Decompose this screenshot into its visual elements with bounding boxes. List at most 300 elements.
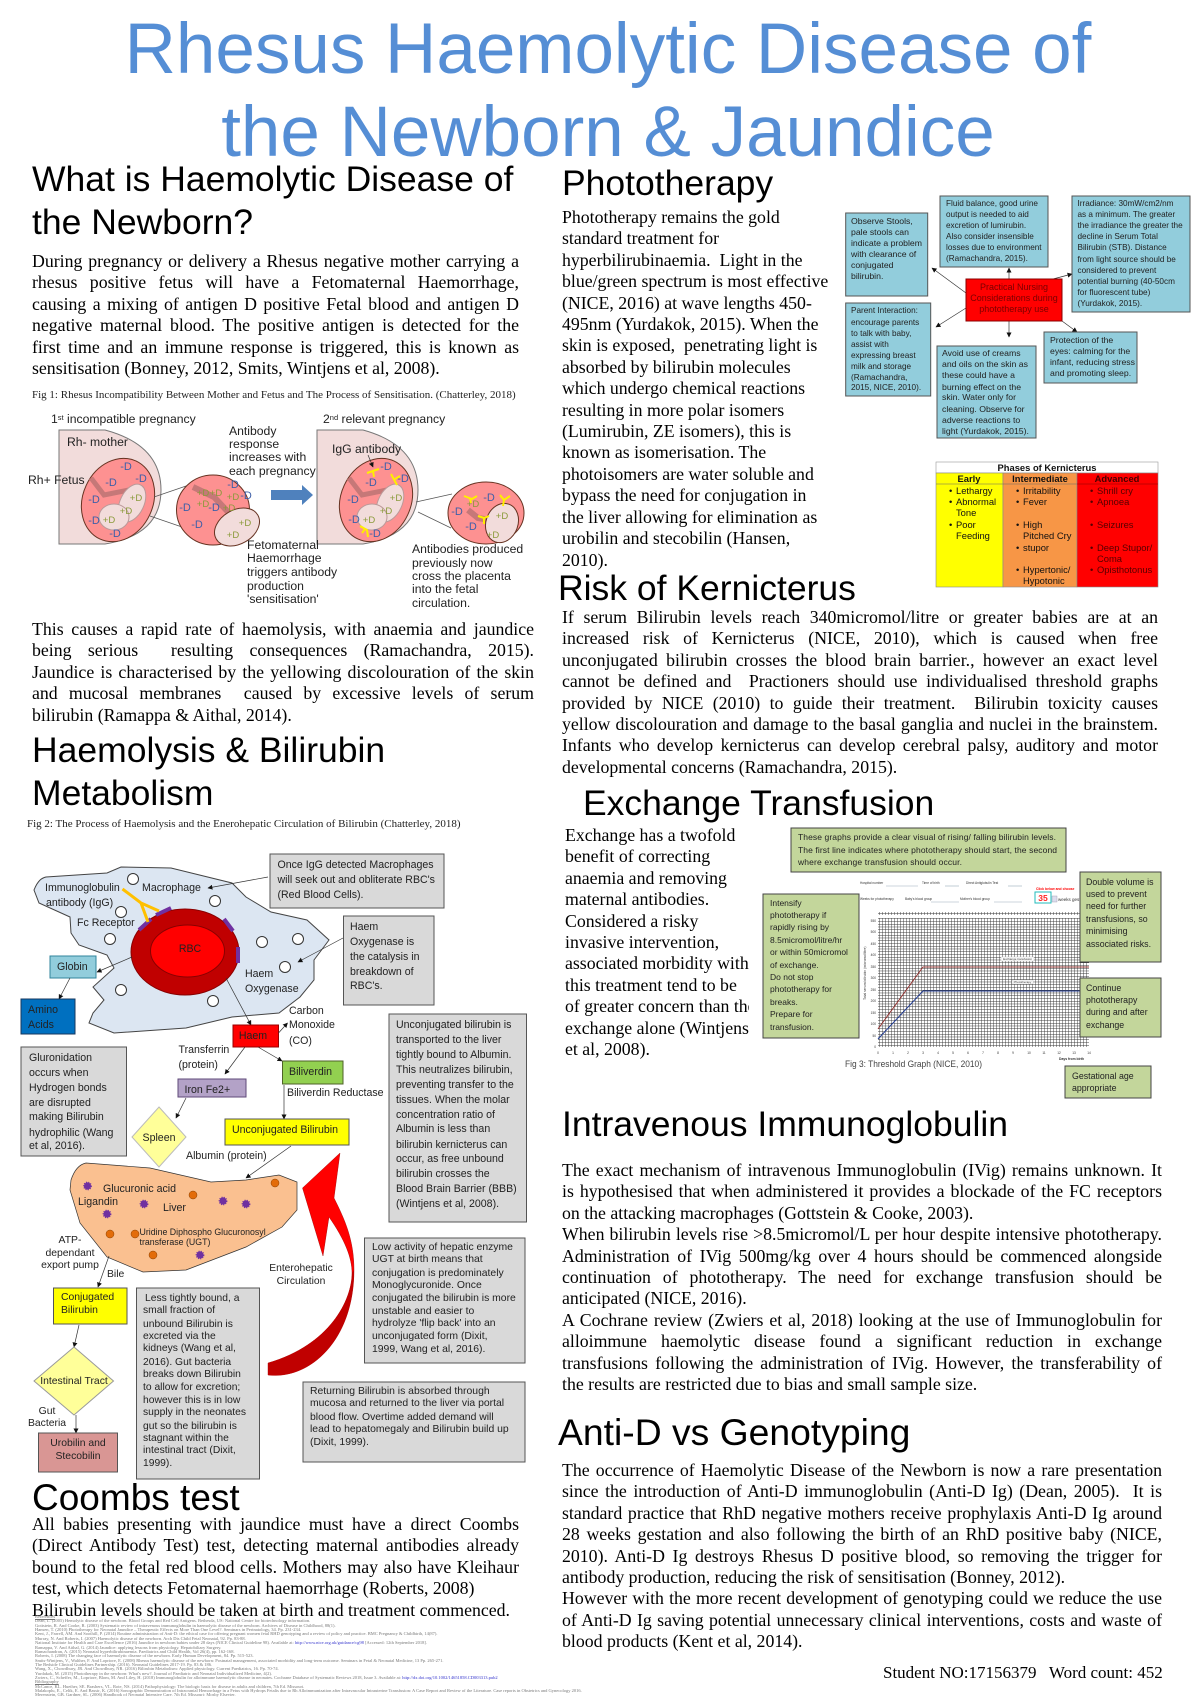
figure 1 labels: Antibodies produced [412, 542, 523, 556]
liver: Albumin (protein) [186, 1150, 267, 1162]
column: intermediate: • [1016, 519, 1019, 530]
box: irradiance: considered to prevent [1078, 266, 1157, 275]
figure 1 labels: relevant pregnancy [338, 412, 446, 426]
callout: continue phototherapy: during and after [1086, 1007, 1148, 1017]
liver [41, 1146, 297, 1272]
callout: unconjugated bilirubin: Blood Brain Barrier (BBB) [396, 1183, 517, 1195]
box: fluid balance: Also consider insensible [946, 232, 1034, 241]
threshold chart: 1 [892, 1051, 894, 1055]
threshold chart: 0 [877, 1051, 879, 1055]
second pregnancy mother and fetus [317, 430, 426, 554]
threshold chart: Exchange transfusion [1003, 957, 1032, 961]
box: avoid creams: and oils on the skin as [942, 359, 1029, 369]
callout: intensify phototherapy: phototherapy for [770, 984, 832, 994]
enlarged view one: -D [179, 502, 191, 514]
graph form header: 35 [1038, 893, 1048, 903]
box: irradiance: decline in Serum Total [1078, 232, 1158, 241]
callout: returning bilirubin: lead to hepatomegaly and Bilirubin build up [310, 1424, 509, 1435]
callout: low activity of UGT: hydrolyze 'flip back' into an [372, 1318, 496, 1329]
column: advanced: • [1090, 496, 1093, 507]
second pregnancy mother and fetus: +D [390, 493, 402, 504]
macrophage cell: antibody (IgG) [46, 897, 113, 909]
table title: Phases of Kernicterus [998, 462, 1096, 473]
text block: phototherapy: skin is exposed, penetrating light is [562, 335, 817, 355]
first pregnancy mother and fetus: -D [109, 528, 121, 540]
column: intermediate: Irritability [1023, 485, 1061, 496]
column: early: Abnormal [956, 496, 996, 507]
callout: low activity of UGT: unstable and easier to [372, 1306, 474, 1317]
conjugated bilirubin path: Conjugated [61, 1292, 114, 1303]
arrow: enterohepatic circulation [268, 1153, 354, 1375]
caption: figure 1: Fig 1: Rhesus Incompatibility Between Mother and Fetus and The Process of Sensitisation. (Chatterley, 2018) [32, 389, 516, 401]
references: Roberts, I. (2008) The changing face of haemolytic disease of the newborn. Early Human Development, 84. Pp. 515-523. [35, 1653, 254, 1658]
callout: unconjugated bilirubin: bilirubin kernicterus can [396, 1139, 507, 1151]
callout: double volume: transfusions, so [1086, 914, 1148, 924]
box: observe stools: bilirubin. [851, 271, 883, 281]
figure 1 labels: production [247, 579, 304, 593]
callout: double volume [1080, 872, 1161, 962]
globin and amino acids [21, 956, 132, 1034]
second pregnancy mother and fetus: -D [365, 477, 377, 489]
enlarged view one [150, 475, 266, 554]
text block: haemolysis consequences: This causes a rapid rate of haemolysis, with anaemia and jaundice [32, 619, 534, 639]
callout: double volume: Double volume is [1086, 877, 1154, 887]
box: parent interaction: 2015, NICE, 2010). [851, 383, 921, 392]
first pregnancy mother and fetus: +D [103, 515, 115, 526]
box: observe stools: conjugated [851, 260, 894, 270]
text block: haemolysis consequences: being serious resulting consequences (Ramachandra, 2015). [32, 640, 534, 660]
column: advanced: Coma [1097, 553, 1123, 564]
callout: haem oxygenase [298, 916, 434, 1005]
text block: exchange transfusion: Considered a risky [565, 911, 698, 931]
text block: phototherapy: hyperbilirubinaemia. Light in the [562, 250, 802, 270]
threshold chart: 12 [1057, 1051, 1061, 1055]
callout: low activity of UGT: conjugation is predominately [372, 1268, 504, 1279]
first pregnancy mother and fetus [59, 430, 168, 554]
conjugated bilirubin path: Stecobilin [55, 1451, 101, 1462]
references: Malakoplu, E., Celik, E. And Bassir, K. (2016) Sonographic Demonstration of Intracranial Hemorrhage in a Fetus with Hydrops Fetalis due to Rh Alloimmunization after Intravascular Intrauterine Transfusion: A Case Report and Review of the Literature. Case reports in Obstetrics and Gynecology 2016. [35, 1688, 582, 1693]
callout: double volume: need for further [1086, 901, 1146, 911]
threshold chart: 0 [874, 1045, 876, 1049]
callout: intensify phototherapy [763, 894, 859, 1038]
callout: gluronidation: et al, 2016). [29, 1140, 85, 1152]
callout: unconjugated bilirubin: bilirubin crosses the [396, 1168, 490, 1180]
column: early: Tone [956, 507, 976, 518]
callout: unconjugated bilirubin: preventing transfer to the [396, 1079, 514, 1091]
callout: continue phototherapy: phototherapy [1086, 995, 1138, 1005]
liver: ATP- [59, 1235, 81, 1246]
text block: exchange transfusion [565, 825, 756, 1059]
text block: introduction: negative maternal blood. The positive antigen is detected for the [32, 315, 519, 335]
text block: coombs test: (Direct Antibody Test) test, detecting maternal antibodies already [32, 1535, 519, 1555]
callout: low activity of UGT: Monoglycuronide. Once [372, 1280, 482, 1291]
figure 1 labels: circulation. [412, 596, 470, 610]
text block: risk of kernicterus: developmental concerns (Ramachandra, 2015). [562, 757, 897, 777]
second pregnancy mother and fetus: -D [369, 528, 381, 540]
globin and amino acids: Acids [28, 1019, 54, 1031]
threshold chart: Days from birth [1059, 1057, 1084, 1061]
text block: coombs test: Bilirubin levels should be taken at birth and treatment commenced. [32, 1600, 510, 1620]
callout: gluronidation [21, 1047, 126, 1156]
haem and products: Biliverdin Reductase [287, 1087, 384, 1099]
conjugated bilirubin path: Intestinal Tract [40, 1376, 108, 1387]
references: References [35, 1614, 55, 1619]
column: intermediate [1003, 473, 1077, 587]
haem and products: (CO) [289, 1035, 312, 1047]
callout: macrophages: Once IgG detected Macrophages [278, 859, 434, 871]
graph form header: Time of birth [922, 881, 940, 885]
text block: haemolysis consequences: Jaundice is characterised by the yellowing discolouration of the skin [32, 662, 534, 682]
threshold chart: 6 [967, 1051, 969, 1055]
callout: less tightly bound: small fraction of [143, 1305, 215, 1316]
threshold chart: 4 [937, 1051, 939, 1055]
text block: intravenous immunoglobulin: anticipated (NICE, 2016). [562, 1288, 747, 1308]
figure 3: threshold graph with callouts [749, 825, 1167, 1105]
callout: less tightly bound: stagnant within the [143, 1433, 229, 1444]
haem and products: Transferrin [178, 1044, 229, 1056]
callout: continue phototherapy: Continue [1086, 983, 1121, 993]
references: Dean, L. (2005) Hemolytic disease of the newborn. Blood Groups and Red Cell Antigens. Bethesda, US: National Centre for biotechnology information. [35, 1618, 310, 1623]
box: observe stools [846, 213, 928, 296]
threshold chart: Total serum bilirubin (micromol/litre) [863, 946, 867, 1000]
column: early [936, 473, 1003, 587]
column: early: Feeding [956, 530, 990, 541]
spleen decision [132, 1107, 186, 1167]
enlarged view two: +D [467, 499, 479, 510]
text block: risk of kernicterus: cannot be defined and Practioners should use individualised threshold graphs [562, 671, 1158, 691]
text block: exchange transfusion: invasive intervention, [565, 932, 719, 952]
callout: low activity of UGT: Low activity of hepatic enzyme [372, 1242, 513, 1253]
box: irradiance: for fluorescent tube) [1078, 288, 1151, 297]
liver: Liver [163, 1202, 186, 1214]
threshold chart: 7 [982, 1051, 984, 1055]
callout: returning bilirubin: blood flow. Overtime added demand will [310, 1412, 494, 1423]
text block: introduction: rhesus positive fetus will have a Fetomaternal Haemorrhage, [32, 272, 519, 292]
callout: less tightly bound: kidneys (Wang et al, [143, 1343, 236, 1354]
text block: risk of kernicterus: yellow discolouration and damage to the basal ganglia and nuclei in the brainstem. [562, 714, 1158, 734]
text block: anti-d vs genotyping: blood products (Kent et al, 2014). [562, 1631, 802, 1651]
column: advanced: Seizures [1097, 519, 1134, 530]
threshold chart: 300 [871, 976, 876, 980]
heading: phototherapy: Phototherapy [562, 163, 773, 203]
callout: less tightly bound: supply in the neonates [143, 1407, 246, 1418]
figure 1 labels: response [229, 437, 279, 451]
concept map: practical nursing considerations [845, 196, 1190, 438]
callout: haem oxygenase: Oxygenase is [350, 936, 414, 948]
callout: low activity of UGT: unconjugated form (Dixit, [372, 1331, 488, 1342]
text block: anti-d vs genotyping: 2010). Anti-D Ig destroys Rhesus D positive blood, so removing the trigger for [562, 1546, 1162, 1566]
text block: haemolysis consequences: bilirubin (Ramappa & Aithal, 2014). [32, 705, 292, 725]
graph form header: Baby's blood group [905, 897, 932, 901]
threshold chart: 13 [1072, 1051, 1076, 1055]
text block: intravenous immunoglobulin [562, 1160, 1162, 1394]
haem and products: (protein) [178, 1059, 218, 1071]
text block: intravenous immunoglobulin: When bilirubin levels rise >8.5micromol/L per hour despite intensive phototherapy. [562, 1224, 1162, 1244]
text block: anti-d vs genotyping: 28 weeks gestation and also following the birth of an RhD positive baby (NICE, [562, 1524, 1162, 1544]
box: avoid creams [937, 346, 1036, 438]
figure 1 labels: cross the placenta [412, 569, 511, 583]
haem and products [176, 978, 384, 1145]
text block: phototherapy: known as isomerisation. The [562, 442, 766, 462]
title: Rhesus Haemolytic Disease of [125, 10, 1091, 89]
threshold chart: 11 [1042, 1051, 1046, 1055]
threshold chart: 5 [952, 1051, 954, 1055]
box: irradiance: from light source should be [1078, 255, 1176, 264]
column: intermediate: stupor [1023, 542, 1049, 553]
enlarged view one: +D [239, 518, 251, 529]
box: avoid creams: Avoid use of creams [942, 348, 1021, 358]
references: National Institute for Health and Care Excellence (2016) Jaundice in newborn babies under 28 days (NICE Clinical Guideline 98). Available at: http://www.nice.org.uk/guidance/cg98 [Accessed: 12th September 2018]. [35, 1640, 427, 1645]
column: advanced: • [1090, 542, 1093, 553]
threshold chart: 2 [907, 1051, 909, 1055]
figure 1 labels: into the fetal [412, 582, 478, 596]
callout: unconjugated bilirubin: tightly bound to Albumin. [396, 1049, 511, 1061]
callout: unconjugated bilirubin: Albumin is less than [396, 1123, 490, 1135]
callout: less tightly bound: however this is in low [143, 1395, 241, 1406]
text block: exchange transfusion: exchange alone (Wintjens [565, 1018, 749, 1038]
callout: unconjugated bilirubin: occur, as free unbound [396, 1153, 504, 1165]
text block: intravenous immunoglobulin: continuation of phototherapy. The need for exchange transfusion should be [562, 1267, 1162, 1287]
second pregnancy mother and fetus: -D [347, 494, 359, 506]
callout: intensify phototherapy: of exchange. [770, 960, 819, 970]
globin and amino acids: Globin [57, 961, 88, 973]
threshold chart: 450 [871, 942, 876, 946]
column: intermediate: Intermediate [1012, 473, 1068, 484]
text block: exchange transfusion: Exchange has a twofold [565, 825, 735, 845]
threshold chart: 3 [922, 1051, 924, 1055]
callout: less tightly bound: 2016). Gut bacteria [143, 1357, 231, 1368]
callout: low activity of UGT [364, 1238, 525, 1363]
text block: introduction [32, 251, 519, 378]
box: fluid balance: Fluid balance, good urine [946, 199, 1038, 208]
column: intermediate: High [1023, 519, 1042, 530]
box: protection of the eyes: eyes: calming for the [1050, 346, 1130, 356]
enlarged view two: -D [483, 492, 495, 504]
callout: intensify phototherapy: transfusion. [770, 1022, 814, 1032]
callout: returning bilirubin: Returning Bilirubin is absorbed through [310, 1386, 490, 1397]
threshold chart: Phototherapy [1014, 980, 1032, 984]
heading: what is haemolytic disease [32, 159, 514, 242]
box: protection of the eyes: infant, reducing stress [1050, 357, 1136, 367]
threshold chart: 400 [871, 953, 876, 957]
text block: risk of kernicterus [562, 607, 1158, 777]
threshold chart: 250 [871, 988, 876, 992]
references: Wang, X., Chowdhury, JR. And Chowdhury, NR. (2016) Bilirubin Metabolism: Applied physiology. Current Paediatrics, 16. Pp. 70-74. [35, 1666, 279, 1671]
callout: haem oxygenase: RBC's. [350, 980, 383, 992]
column: advanced: Apnoea [1097, 496, 1130, 507]
macrophage cell: Haem [245, 968, 273, 980]
red blood cell: RBC [179, 943, 202, 955]
figure 1 labels: increases with [229, 450, 306, 464]
macrophage cell: Macrophage [142, 882, 201, 894]
callout: unconjugated bilirubin [389, 1014, 526, 1222]
figure 1 labels: IgG antibody [332, 442, 402, 456]
table title [936, 462, 1158, 473]
box: practical nursing considerations [966, 279, 1062, 321]
callout: gluronidation: making Bilirubin [29, 1111, 104, 1123]
figure 1 labels: 2 [323, 412, 330, 426]
box: parent interaction [846, 303, 931, 396]
liver: Glucuronic acid [103, 1183, 176, 1195]
text block: phototherapy: the liver allowing for elimination as [562, 507, 817, 527]
callout: graphs explanation: where exchange transfusion should occur. [797, 857, 962, 867]
text block: intravenous immunoglobulin: transfusions following the administration of IVig. However, the transferability of [562, 1353, 1162, 1373]
heading: coombs test: Coombs test [32, 1477, 240, 1518]
callout: graphs explanation: These graphs provide a clear visual of rising/ falling bilirubin levels. [798, 832, 1056, 842]
references: Murray, N. And Roberts, I. (2007) Haemolytic disease of the newborn. Arch Dis Child Fetal Neonatal, 92. Pp. 83-88. [35, 1636, 246, 1641]
callout: low activity of UGT: 1999, Wang et al, 2016). [372, 1344, 485, 1355]
text block: phototherapy: blue/green spectrum is most effective [562, 271, 828, 291]
threshold chart: 10 [1027, 1051, 1031, 1055]
haem and products: Monoxide [289, 1019, 335, 1031]
enlarged view one: +D [227, 530, 239, 541]
column: advanced: Opisthotonus [1097, 564, 1153, 575]
callout: gluronidation: Gluronidation [29, 1052, 92, 1064]
box: irradiance: Bilirubin (STB). Distance [1078, 243, 1167, 252]
box: observe stools: indicate a problem [851, 238, 922, 248]
conjugated bilirubin path: Gut [39, 1406, 55, 1417]
figure 1 labels: Haemorrhage [247, 551, 322, 565]
callout: gluronidation: are disrupted [29, 1097, 91, 1109]
text block: coombs test [32, 1514, 519, 1620]
box: irradiance: the irradiance the greater the [1078, 221, 1183, 230]
graph form header: Hospital number [860, 881, 884, 885]
figure 1 labels: previously now [412, 556, 493, 570]
conjugated bilirubin path: Urobilin and [50, 1438, 106, 1449]
text block: phototherapy: photoisomers are water soluble and [562, 464, 814, 484]
callout: haem oxygenase: the catalysis in [350, 951, 420, 963]
callout: returning bilirubin: mucosa and returned to the liver via portal [310, 1398, 504, 1409]
column: advanced: • [1090, 485, 1093, 496]
text block: phototherapy: bypass the need for conjugation in [562, 485, 806, 505]
title [125, 10, 1092, 172]
box: avoid creams: light (Yurdakok, 2015). [942, 426, 1029, 436]
text block: anti-d vs genotyping: The occurrence of Haemolytic Disease of the Newborn is now a rare presentation [562, 1460, 1162, 1480]
references: Smits-Wintjens, V., Walther, F. And Lopriore, E. (2008) Rhesus haemolytic disease of the newborn: Postnatal management, associated morbidity and long-term outcome. Seminars in Fetal & Neonatal Medicine, 13 Pp. 265-271. [35, 1658, 443, 1663]
box: fluid balance [940, 196, 1048, 267]
box: irradiance [1072, 196, 1190, 312]
callout: less tightly bound: Less tightly bound, a [145, 1293, 240, 1304]
figure 1 labels: incompatible pregnancy [64, 412, 197, 426]
figure 1 labels: 'sensitisation' [247, 592, 319, 606]
callout: gestational age [1065, 1066, 1151, 1098]
second pregnancy mother and fetus: -D [348, 514, 360, 526]
text block: introduction: During pregnancy or delivery a Rhesus negative mother carrying a [32, 251, 519, 271]
callout: gestational age: Gestational age [1072, 1071, 1134, 1081]
threshold chart: 8 [997, 1051, 999, 1055]
figure 1 labels: Rh- mother [67, 435, 128, 449]
first pregnancy mother and fetus: +D [130, 493, 142, 504]
text block: exchange transfusion: this treatment tend to be [565, 975, 737, 995]
enlarged view one: -D [240, 490, 252, 502]
first pregnancy mother and fetus: -D [120, 461, 132, 473]
references: Ramachandran, A. (2015) Neonatal hyperbilirubinaemia. Paediatrics and Child Health, Vol 26(4), pp. 162-168. [35, 1649, 235, 1654]
heading: intravenous immunoglobulin: Intravenous Immunoglobulin [562, 1104, 1008, 1144]
callout: macrophages: will seek out and obliterate RBC's [276, 874, 435, 886]
callout: less tightly bound: intestinal tract (Dixit, [143, 1445, 236, 1456]
enlarged view one: -D [208, 502, 220, 514]
callout: unconjugated bilirubin: (Wintjens et al, 2008). [396, 1198, 499, 1210]
references: The Bedside Clinical Guidelines Partnership. (2016). Neonatal Guidelines 2017-19. Pp. 83 & 186. [35, 1662, 212, 1667]
box: parent interaction: Parent Interaction: [851, 306, 918, 315]
text block: exchange transfusion: associated morbidity with [565, 953, 749, 973]
figure 2: haemolysis flow diagram [20, 854, 527, 1480]
callout: graphs explanation [791, 828, 1066, 872]
threshold chart: 50 [872, 1034, 876, 1038]
box: observe stools: pale stools can [851, 227, 909, 237]
graph form header: Click below and choose [1036, 887, 1075, 891]
threshold chart: 350 [871, 965, 876, 969]
heading: what is haemolytic disease: What is Haemolytic Disease of [32, 159, 513, 199]
conjugated bilirubin path: Bilirubin [61, 1305, 98, 1316]
box: irradiance: Irradiance: 30mW/cm2/nm [1078, 199, 1174, 208]
text block: phototherapy: Phototherapy remains the gold [562, 207, 780, 227]
references: Yurdakok, M. (2015) Phototherapy in the newborn: What's new?. Journal of Paediatric and Neonatal Individualized Medicine, 4(2). [35, 1671, 272, 1676]
caption: figure 2: Fig 2: The Process of Haemolysis and the Enerohepatic Circulation of Bilirubin (Chatterley, 2018) [27, 818, 460, 830]
callout: intensify phototherapy: Prepare for [770, 1009, 813, 1019]
box: parent interaction: expressing breast [851, 351, 916, 360]
liver: dependant [45, 1248, 95, 1259]
callout: intensify phototherapy: rapidly rising by [770, 922, 830, 932]
text block: haemolysis consequences: and mucosal membranes caused by excessive levels of serum [32, 683, 534, 703]
box: irradiance: potential burning (40-50cm [1078, 277, 1175, 286]
text block: phototherapy: which undergo chemical reactions [562, 378, 805, 398]
text block: phototherapy: standard treatment for [562, 228, 719, 248]
first pregnancy mother and fetus: -D [88, 515, 100, 527]
heading: exchange transfusion: Exchange Transfusion [583, 783, 934, 823]
text block: phototherapy: 495nm (Yurdakok, 2015). When the [562, 314, 818, 334]
box: avoid creams: adverse reactions to [942, 415, 1020, 425]
callout: low activity of UGT: conjugated the bilirubin is more [372, 1293, 516, 1304]
text block: haemolysis consequences [32, 619, 534, 725]
second pregnancy mother and fetus: -D [397, 473, 409, 485]
box: irradiance: (Yurdakok, 2015). [1078, 299, 1142, 308]
enlarged view one: -D [191, 519, 203, 531]
globin and amino acids: Amino [28, 1004, 58, 1016]
callout: returning bilirubin [303, 1382, 525, 1462]
macrophage cell: Immunoglobulin [45, 882, 120, 894]
text block: phototherapy: (Lumirubin, ZE isomers), this is [562, 421, 791, 441]
haem and products: Haem [239, 1030, 267, 1042]
box: parent interaction: encourage parents [851, 318, 919, 327]
callout: double volume: used to prevent [1086, 889, 1147, 899]
heading: anti-d vs genotyping: Anti-D vs Genotyping [558, 1411, 910, 1453]
second pregnancy mother and fetus: -D [380, 461, 392, 473]
callout: gluronidation: hydrophilic (Wang [29, 1127, 114, 1139]
text block: exchange transfusion: et al, 2008). [565, 1039, 650, 1059]
enlarged view two: +D [496, 511, 508, 522]
figure 1 labels: st [58, 413, 65, 422]
references: Gottstein, R. And Cooke, R. (2003) Systematic review of intravenous immunoglobulin in haemolytic disease of the newborn. Archives of Disease in Childhood, 88(1). [35, 1623, 336, 1628]
figure 1 labels: nd [330, 413, 338, 422]
callout: less tightly bound: gut so the bilirubin is [143, 1421, 237, 1432]
text block: introduction: causing a mixing of antigen D positive Fetal blood and antigen D [32, 294, 519, 314]
box: practical nursing considerations: Considerations during [970, 293, 1058, 303]
references: Zwiers, C., Scheffer, M., Lopriore, Blom, M. And Liley, H. (2018) Immunoglobulin for alloimmune haemolytic disease in neonates. Cochrane Database of Systematic Reviews 2018, Issue 3. Available at: http://dx.doi.org/10.1002/14651858.CD003313.pub2 [35, 1675, 498, 1680]
second pregnancy mother and fetus: +D [380, 506, 392, 517]
text block: intravenous immunoglobulin: is hypothesised that when administered it provides a blockade of the FC receptors [562, 1181, 1162, 1201]
callout: continue phototherapy: exchange [1086, 1020, 1124, 1030]
text block: anti-d vs genotyping: since the introduction of Anti-D immunoglobulin (Anti-D Ig) (Dean, 2005). It is [562, 1481, 1162, 1501]
text block: exchange transfusion: maternal antibodies. [565, 889, 709, 909]
text block: intravenous immunoglobulin: on the attacking macrophages (Gottstein & Cooke, 2003). [562, 1203, 973, 1223]
figure 1 labels: each pregnancy [229, 464, 317, 478]
column: intermediate: Hypertonic/ [1023, 564, 1071, 575]
callout: double volume: associated risks. [1086, 939, 1151, 949]
enlarged view one: +D [197, 499, 209, 510]
figure 1 labels: 1 [51, 412, 58, 426]
figure 1 labels: triggers antibody [247, 565, 338, 579]
